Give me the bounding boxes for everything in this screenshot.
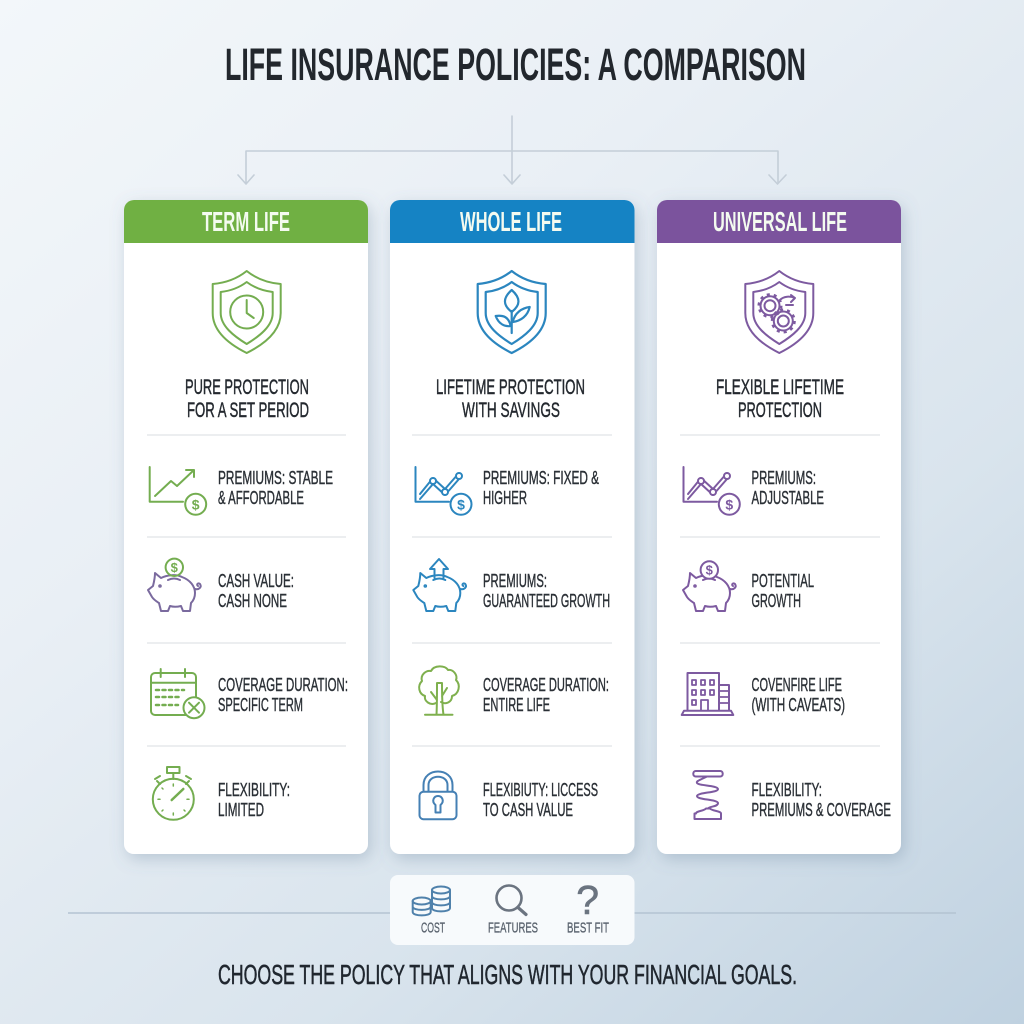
row: coverage duration: ENTIRE LIFE [483,695,550,715]
row: coverage duration: COVERAGE DURATION: [483,675,609,695]
row: flexibility [420,772,598,820]
row: cash value [148,559,294,611]
header: term life: TERM LIFE [202,206,290,237]
row: flexibility: LIMITED [218,800,264,820]
row: guaranteed growth: PREMIUMS: [483,571,547,591]
row: premiums [150,467,333,515]
row: coverage duration: COVERAGE DURATION: [218,675,348,695]
header: universal life [657,200,901,243]
panel: whole life [390,200,634,854]
subtitle: universal life: PROTECTION [738,399,822,422]
row: flexibility: FLEXIBILITY: [218,780,290,800]
legend: cost [413,886,450,936]
icon: rising chart with coin: $ [192,496,200,512]
icon: piggy bank with arrow [413,559,466,611]
icon: piggy bank with coin [148,559,201,611]
row: potential growth [683,561,814,611]
row: premiums: PREMIUMS: STABLE [218,468,333,488]
subtitle: whole life [436,376,585,422]
row: coverage [682,673,845,715]
row: guaranteed growth: GUARANTEED GROWTH [483,591,610,611]
legend: cost: COST [421,920,445,936]
header: whole life: WHOLE LIFE [460,206,562,237]
row: premiums: PREMIUMS: [752,468,816,488]
icon: piggy bank with coin: $ [171,560,179,575]
icon: building [682,673,733,715]
row: potential growth: POTENTIAL [752,571,814,591]
row: potential growth: GROWTH [752,591,801,611]
icon: rising chart with coin [150,467,206,515]
connector arrows [238,116,786,184]
row: coverage duration [151,669,348,718]
legend: best fit: BEST FIT [567,920,609,936]
legend: features: FEATURES [488,920,538,936]
icon: padlock [420,772,456,819]
legend box [390,875,634,945]
icon: line chart with coin: $ [725,496,733,512]
row: flexibility: FLEXIBILITY: [752,780,822,800]
subtitle: whole life: WITH SAVINGS [462,399,560,422]
icon: line chart with coin: $ [457,496,465,512]
subtitle: whole life: LIFETIME PROTECTION [436,376,585,399]
row: coverage duration: SPECIFIC TERM [218,695,303,715]
subtitle: universal life [716,376,844,422]
row: premiums [684,467,824,515]
row: coverage duration [419,666,609,715]
icon: spring [693,771,723,819]
icon: coins [413,886,450,915]
panel: universal life [657,200,901,854]
row: cash value: CASH NONE [218,591,287,611]
row: flexibility: PREMIUMS & COVERAGE [752,800,891,820]
icon: magnifier [496,886,526,914]
row: guaranteed growth [413,559,610,611]
icon: calendar with cross [151,669,204,718]
icon: line chart with coin [684,467,740,515]
row: flexibility: TO CASH VALUE [483,800,573,820]
header: universal life: UNIVERSAL LIFE [713,206,847,237]
row: premiums [416,467,599,515]
row: premiums: ADJUSTABLE [752,488,824,508]
row: cash value: CASH VALUE: [218,571,294,591]
legend: best fit [567,877,609,936]
row: flexibility: FLEXIBIUTY: LICCESS [483,780,598,800]
legend: features [488,886,538,936]
row: coverage: (WITH CAVEATS) [752,695,845,715]
subtitle: term life [185,376,309,422]
icon: shield with clock [213,271,281,353]
icon: shield with plant [478,271,546,353]
icon: question mark: ? [576,877,599,923]
row: coverage: COVENFIRE LIFE [752,675,842,695]
subtitle: universal life: FLEXIBLE LIFETIME [716,376,844,399]
header: term life [124,200,368,243]
row: premiums: PREMIUMS: FIXED & [483,468,599,488]
panel: term life [124,200,368,854]
header: whole life [390,200,634,243]
icon: stopwatch [153,767,194,820]
row: premiums: HIGHER [483,488,527,508]
subtitle: term life: PURE PROTECTION [185,376,309,399]
icon: shield with gears [745,271,813,353]
icon: piggy bank with coin: $ [706,563,714,578]
icon: line chart with coin [416,467,472,515]
subtitle: term life: FOR A SET PERIOD [187,399,309,422]
row: flexibility [153,767,290,820]
row: premiums: & AFFORDABLE [218,488,304,508]
icon: tree [419,666,459,715]
row: flexibility [693,771,891,820]
